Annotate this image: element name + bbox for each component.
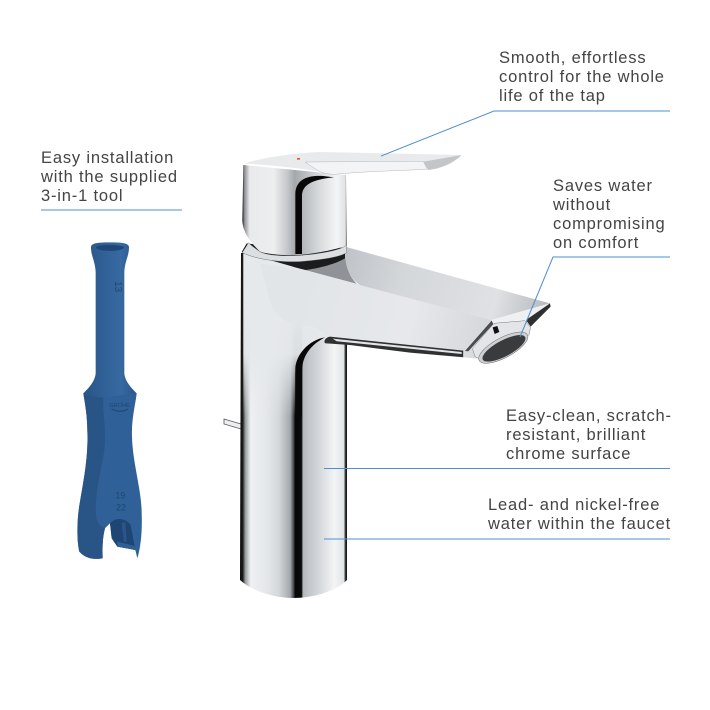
callout: lead-free: Lead- and nickel-free — [488, 496, 660, 514]
callout: easy installation: 3-in-1 tool — [41, 187, 123, 205]
faucet body column — [240, 253, 347, 598]
callout: saves water — [553, 177, 666, 252]
callout: lead-free: water within the faucet — [488, 515, 671, 533]
callout: saves water: compromising — [553, 215, 666, 233]
leader: installation — [41, 209, 182, 211]
leader: chrome surface — [324, 468, 670, 470]
arch shadow — [295, 337, 325, 417]
callout: saves water: Saves water — [553, 177, 653, 195]
lever tip — [423, 155, 462, 170]
pop-up rod — [224, 419, 241, 429]
callout: chrome surface: resistant, brilliant — [506, 426, 646, 444]
handle body — [242, 165, 347, 255]
tool embossed markings: 19 — [115, 491, 125, 501]
callout: smooth control: Smooth, effortless — [499, 49, 646, 67]
faucet upper casting (drawn in 3x coordinates) — [242, 152, 551, 417]
callout: smooth control: control for the whole — [499, 68, 665, 86]
collar shadow — [242, 243, 350, 277]
spout top plane — [345, 247, 550, 320]
leader: smooth control — [381, 111, 670, 156]
handle arch shadow — [295, 176, 334, 254]
tool socket opening — [96, 245, 124, 251]
tool embossed markings: 13 — [112, 281, 123, 293]
tool embossed markings: GROHE — [109, 403, 130, 409]
callout: smooth control — [499, 49, 665, 105]
leader: saves water — [520, 257, 670, 337]
callout: saves water: on comfort — [553, 234, 639, 252]
tool shaft — [83, 242, 137, 403]
callout: easy installation: with the supplied — [41, 168, 178, 186]
callout: lead-free — [488, 496, 671, 533]
icon: chrome faucet — [224, 152, 551, 598]
callout: easy installation — [41, 149, 178, 205]
tool side shading — [77, 393, 105, 559]
tool silhouette with fork — [77, 393, 142, 559]
hot indicator — [297, 158, 300, 160]
spout front face — [243, 253, 492, 417]
aerator — [472, 321, 531, 361]
leader: lead-free — [324, 538, 670, 540]
callout: saves water: without — [553, 196, 611, 214]
lever top — [244, 152, 462, 172]
callout: easy installation: Easy installation — [41, 149, 174, 167]
tool fork recess — [110, 519, 135, 550]
callout: chrome surface: Easy-clean, scratch- — [506, 407, 672, 425]
icon: 3-in-1 installation tool — [77, 242, 142, 559]
spout lip — [492, 303, 550, 323]
tool embossed markings: 22 — [116, 503, 126, 513]
collar ring — [242, 243, 347, 262]
spout underside — [324, 337, 463, 357]
callout: chrome surface — [506, 407, 672, 463]
callout: chrome surface: chrome surface — [506, 445, 631, 463]
callout: smooth control: life of the tap — [499, 87, 606, 105]
callout leader lines — [41, 111, 670, 539]
lever lower band — [305, 161, 427, 174]
tool embossed markings — [109, 281, 130, 513]
